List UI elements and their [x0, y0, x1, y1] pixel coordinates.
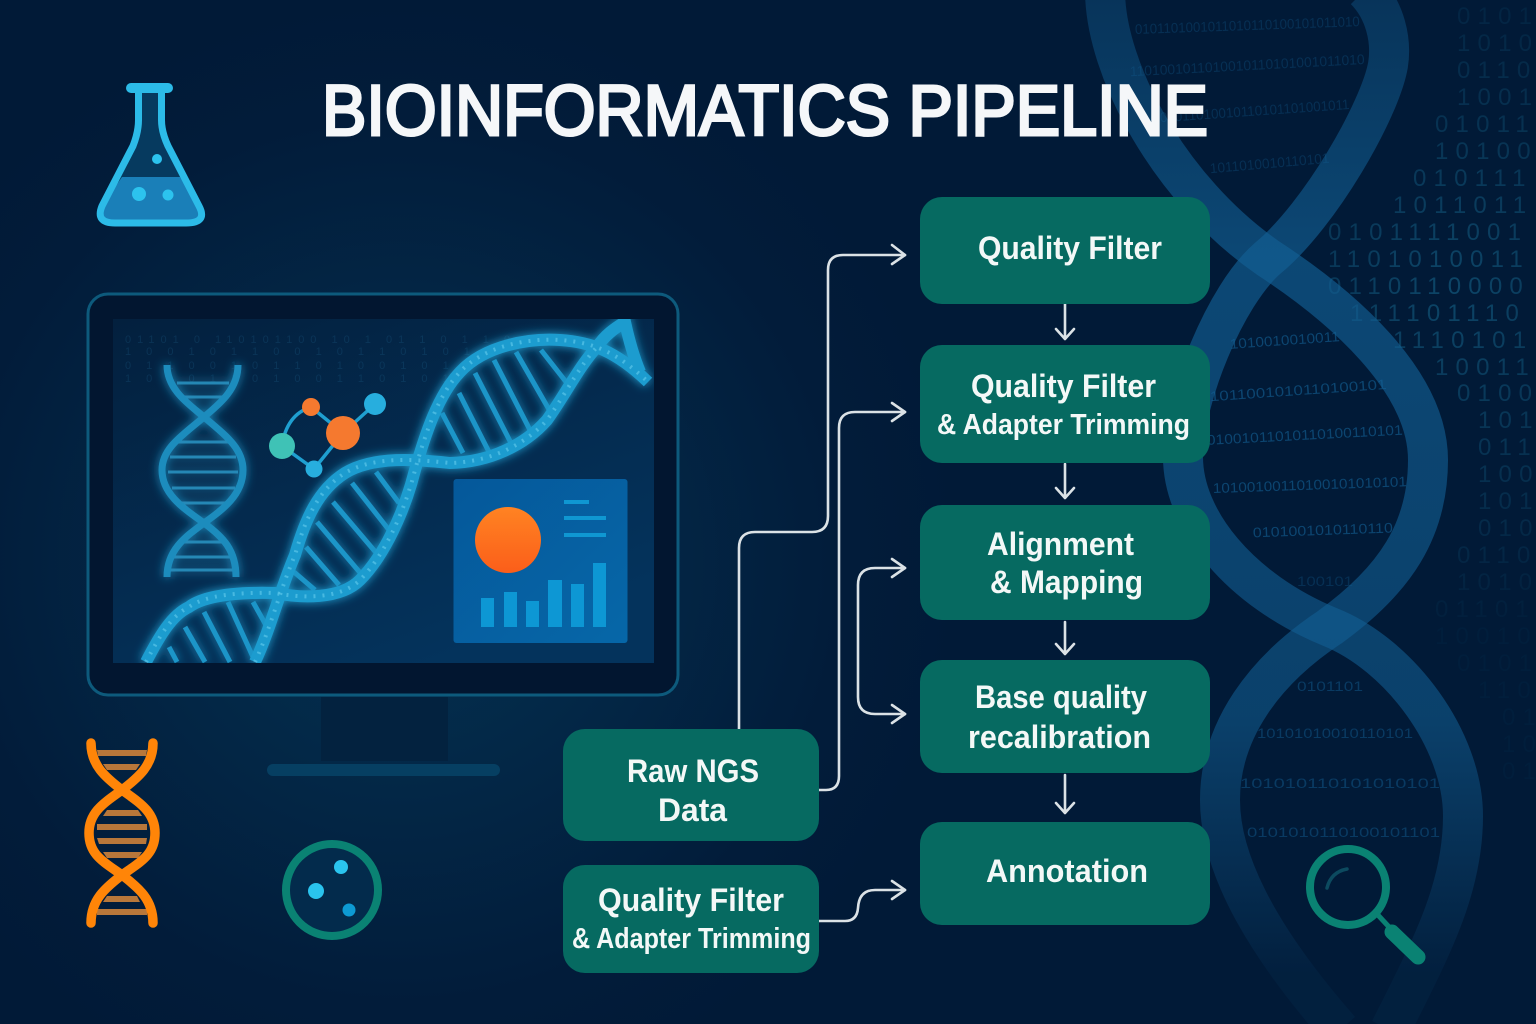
monitor stand [321, 697, 448, 761]
background binary columns: 1011011 [1393, 192, 1533, 219]
arrow: recalibration to annotation [1056, 775, 1074, 813]
background binary columns: 10010 [1435, 623, 1536, 650]
background binary columns: 0110 [1457, 57, 1536, 84]
monitor [88, 294, 678, 776]
icon: magnifier [1310, 849, 1418, 957]
background binary columns: 0110 [1457, 542, 1536, 569]
box: base quality recalibration: recalibration [968, 719, 1151, 755]
box: annotation: Annotation [986, 853, 1148, 889]
binary rungs middle: 0101001010110110 [1253, 519, 1393, 540]
icon: petri dish [286, 844, 378, 936]
binary rungs upper: 01011010010110101101001011 [1159, 96, 1350, 125]
background binary columns [1329, 8, 1532, 590]
box: alignment and mapping [920, 505, 1210, 620]
icon: flask [100, 83, 202, 223]
binary rungs middle: 10100100110100101010101 [1213, 473, 1407, 496]
binary rungs middle: 01001011010110100110101 [1206, 422, 1403, 448]
background binary columns: 01101 [1435, 596, 1536, 623]
binary rungs upper [1129, 13, 1365, 176]
binary rungs lower: 101010110101010101 [1240, 775, 1440, 791]
binary rungs lower: 10101010010110101 [1257, 725, 1413, 741]
title: BIOINFORMATICS PIPELINE [322, 72, 1208, 151]
dashboard panel [454, 479, 628, 643]
box: quality filter and adapter trimming lower: & Adapter Trimming [572, 923, 811, 955]
connector: alignment and recalibration [858, 559, 905, 723]
box: quality filter and adapter trimming lower: Quality Filter [598, 882, 784, 918]
screen DNA helix large [146, 322, 648, 662]
binary rungs middle [1206, 328, 1407, 589]
background binary columns: 1110101 [1393, 327, 1533, 354]
background binary columns: 010111 [1413, 165, 1533, 192]
box: raw NGS data: Data [658, 792, 727, 828]
connector: raw data to quality filter [739, 245, 905, 729]
orange circle [475, 507, 541, 573]
monitor: 1 0 0 1 0 1 1 0 0 1 0 1 1 0 1 0 1 1 [125, 346, 497, 358]
binary rungs lower: 0101010110100101101 [1247, 824, 1440, 840]
background binary columns: 0101111001 [1328, 219, 1528, 246]
bar chart [481, 563, 606, 627]
screen DNA helix small [162, 365, 243, 577]
box: quality filter and adapter trimming: & Adapter Trimming [937, 409, 1190, 441]
monitor: 0 1 1 0 0 1 0 1 1 0 1 0 0 1 0 1 0 [125, 360, 476, 372]
box: alignment and mapping: Alignment [987, 526, 1134, 562]
background binary columns: 10100 [1435, 138, 1536, 165]
connector: trimming to annotation [819, 881, 905, 921]
binary rungs upper: 1011010010110101 [1209, 150, 1330, 176]
box: quality filter [920, 197, 1210, 304]
background binary columns: 01011 [1435, 111, 1536, 138]
binary rungs middle: 1011001010110100101 [1209, 376, 1387, 404]
arrow: alignment to recalibration [1056, 622, 1074, 654]
box: quality filter and adapter trimming [920, 345, 1210, 463]
binary rungs lower: 0101101 [1297, 678, 1363, 694]
box: base quality recalibration: Base quality [975, 679, 1147, 715]
arrow: filter to trimming [1056, 304, 1074, 339]
binary rungs middle: 100101 [1297, 573, 1353, 589]
binary rungs lower [1240, 678, 1440, 840]
legend lines [564, 500, 606, 537]
binary rungs upper: 1101001011010010110101001011010 [1129, 51, 1365, 79]
box: quality filter and adapter trimming lower [563, 865, 819, 973]
box: alignment and mapping: & Mapping [990, 564, 1143, 600]
large background DNA helix [1105, 0, 1463, 1024]
connector: raw data to adapter trimming [819, 403, 905, 790]
binary rungs upper: 0101101001011010110100101011010 [1135, 13, 1360, 37]
monitor: 1 0 1 0 1 1 0 1 0 0 1 1 0 1 0 1 [125, 373, 455, 385]
background binary columns: 0110110000 [1328, 273, 1530, 300]
background binary columns: 10011 [1435, 354, 1536, 381]
binary rungs middle: 1010010010011 [1229, 328, 1340, 352]
background binary columns: 1101010011 [1328, 246, 1530, 273]
monitor: 01101 0 110101100 10 1 01 1 0 1 1 0 1 [125, 334, 537, 346]
box: raw NGS data [563, 729, 819, 841]
background binary columns: 111101110 [1350, 300, 1526, 327]
molecule [269, 393, 386, 478]
box: annotation [920, 822, 1210, 925]
box: quality filter and adapter trimming: Quality Filter [971, 368, 1156, 404]
arrow: trimming to alignment [1056, 464, 1074, 498]
box: raw NGS data: Raw NGS [627, 753, 759, 789]
box: base quality recalibration [920, 660, 1210, 773]
box: quality filter: Quality Filter [978, 230, 1162, 266]
icon: orange DNA [89, 743, 155, 923]
